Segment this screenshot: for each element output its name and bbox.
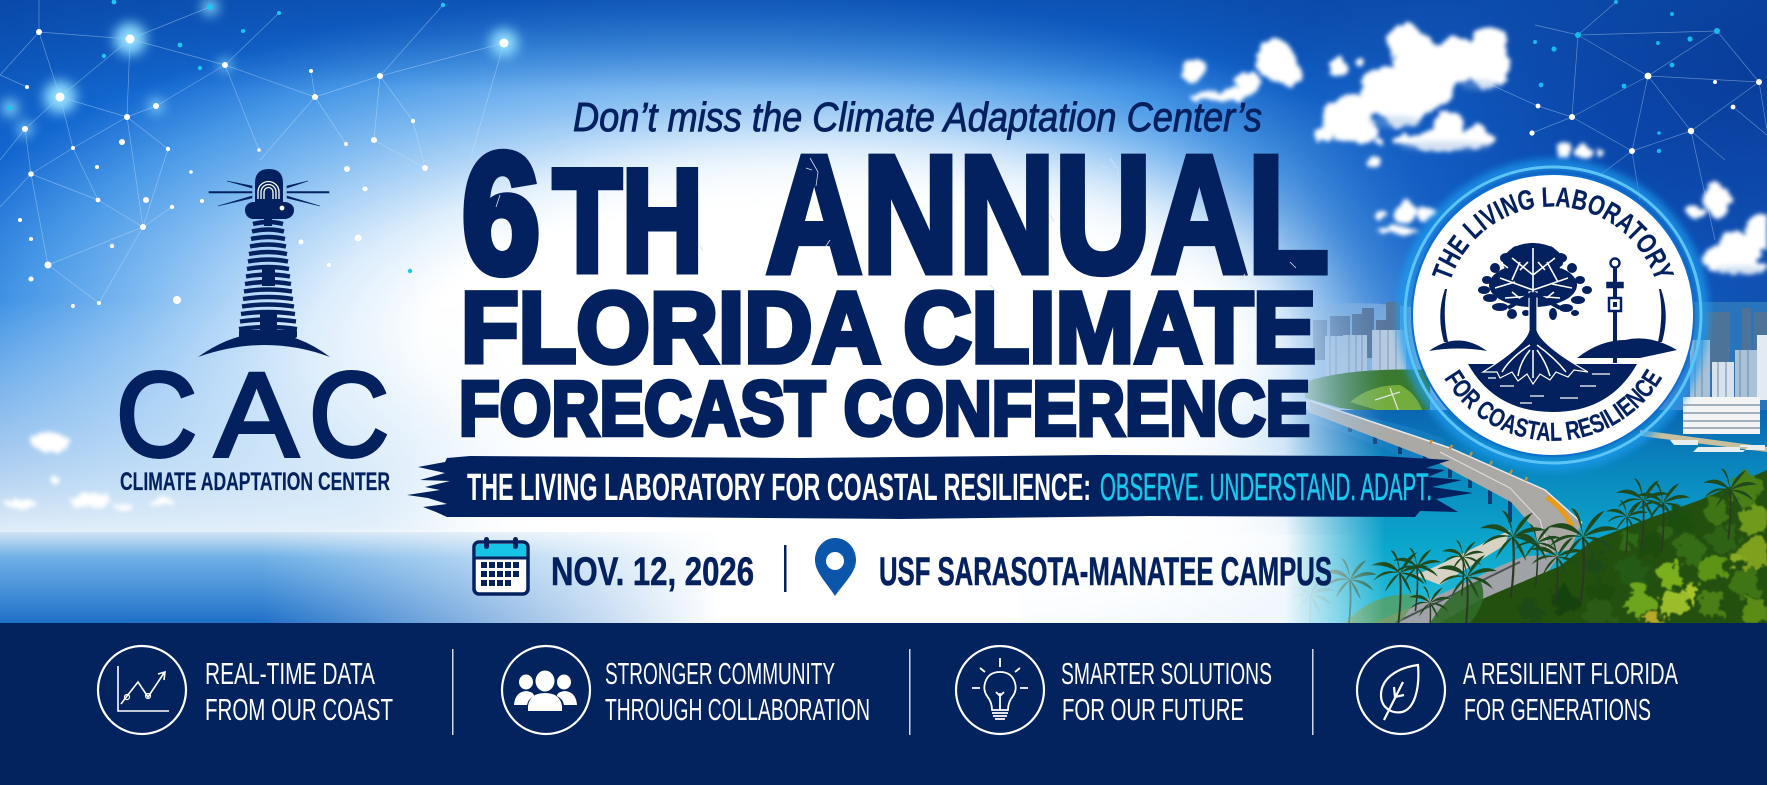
palm trees bbox=[1298, 468, 1757, 623]
benefit: stronger community: THROUGH COLLABORATION bbox=[605, 692, 870, 727]
badge: living laboratory bbox=[1392, 153, 1713, 474]
benefit: smarter solutions: SMARTER SOLUTIONS bbox=[1061, 656, 1272, 691]
hillside greenery bbox=[1345, 470, 1767, 631]
tagline cyan: OBSERVE. UNDERSTAND. ADAPT. bbox=[1100, 467, 1432, 509]
white building bbox=[1640, 397, 1767, 452]
headline: TH bbox=[553, 139, 703, 302]
badge bottom text: FOR COASTAL RESILIENCE bbox=[1444, 368, 1662, 442]
clouds bbox=[2, 24, 1767, 508]
icon: people bbox=[502, 646, 590, 734]
icon: lighthouse bbox=[198, 169, 330, 357]
benefit: stronger community bbox=[502, 646, 870, 734]
skyline right bbox=[1690, 302, 1767, 412]
benefit: real-time data: FROM OUR COAST bbox=[205, 692, 393, 727]
logo letters CAC bbox=[116, 348, 389, 482]
icon: location pin bbox=[815, 538, 856, 596]
icon: mangrove tree bbox=[1478, 243, 1592, 384]
badge landscape bbox=[1429, 338, 1677, 412]
footer band bbox=[0, 623, 1767, 785]
water bbox=[1265, 410, 1767, 623]
date: NOV. 12, 2026 bbox=[551, 550, 754, 594]
bridge bbox=[1308, 401, 1582, 554]
logo letters CAC: A bbox=[215, 348, 298, 482]
headline: FLORIDA CLIMATE bbox=[461, 272, 1316, 384]
sea left bbox=[0, 530, 1020, 623]
star network right bbox=[1480, 0, 1767, 240]
benefit: real-time data bbox=[98, 646, 393, 734]
CAC logo bbox=[116, 169, 390, 496]
logo name: CLIMATE ADAPTATION CENTER bbox=[120, 468, 390, 496]
logo letters CAC: C bbox=[116, 348, 197, 482]
divider bbox=[784, 545, 786, 592]
badge top text: THE LIVING LABORATORY bbox=[1432, 187, 1674, 278]
intro line: Don’t miss the Climate Adaptation Center’s bbox=[573, 94, 1262, 140]
venue: USF SARASOTA-MANATEE CAMPUS bbox=[879, 550, 1332, 594]
benefit: stronger community: STRONGER COMMUNITY bbox=[605, 656, 835, 691]
headline specks bbox=[496, 158, 1296, 293]
icon: leaf bbox=[1357, 646, 1445, 734]
coastal scene bbox=[1265, 302, 1767, 642]
icon: sensor pole bbox=[1607, 258, 1623, 363]
icon: line chart bbox=[98, 646, 186, 734]
tagline brush band bbox=[407, 455, 1473, 519]
headline bbox=[459, 119, 1329, 452]
benefit: smarter solutions: FOR OUR FUTURE bbox=[1062, 692, 1244, 727]
logo letters CAC: C bbox=[309, 348, 389, 482]
star network left bbox=[0, 0, 518, 308]
benefit: real-time data: REAL-TIME DATA bbox=[205, 656, 375, 691]
icon: calendar bbox=[474, 537, 528, 594]
benefit: smarter solutions bbox=[956, 646, 1272, 734]
headline: 6 bbox=[462, 119, 540, 309]
headline: FORECAST CONFERENCE bbox=[459, 366, 1310, 452]
icon: light bulb bbox=[956, 646, 1044, 734]
benefit: resilient florida: FOR GENERATIONS bbox=[1464, 692, 1651, 727]
badge side arcs bbox=[1440, 289, 1666, 342]
headline: ANNUAL bbox=[766, 122, 1329, 308]
lower road and shore bbox=[1373, 530, 1560, 623]
tagline white: THE LIVING LABORATORY FOR COASTAL RESILIENCE: bbox=[467, 467, 1091, 509]
skyline left bbox=[1305, 302, 1439, 410]
benefit: resilient florida bbox=[1357, 646, 1678, 734]
